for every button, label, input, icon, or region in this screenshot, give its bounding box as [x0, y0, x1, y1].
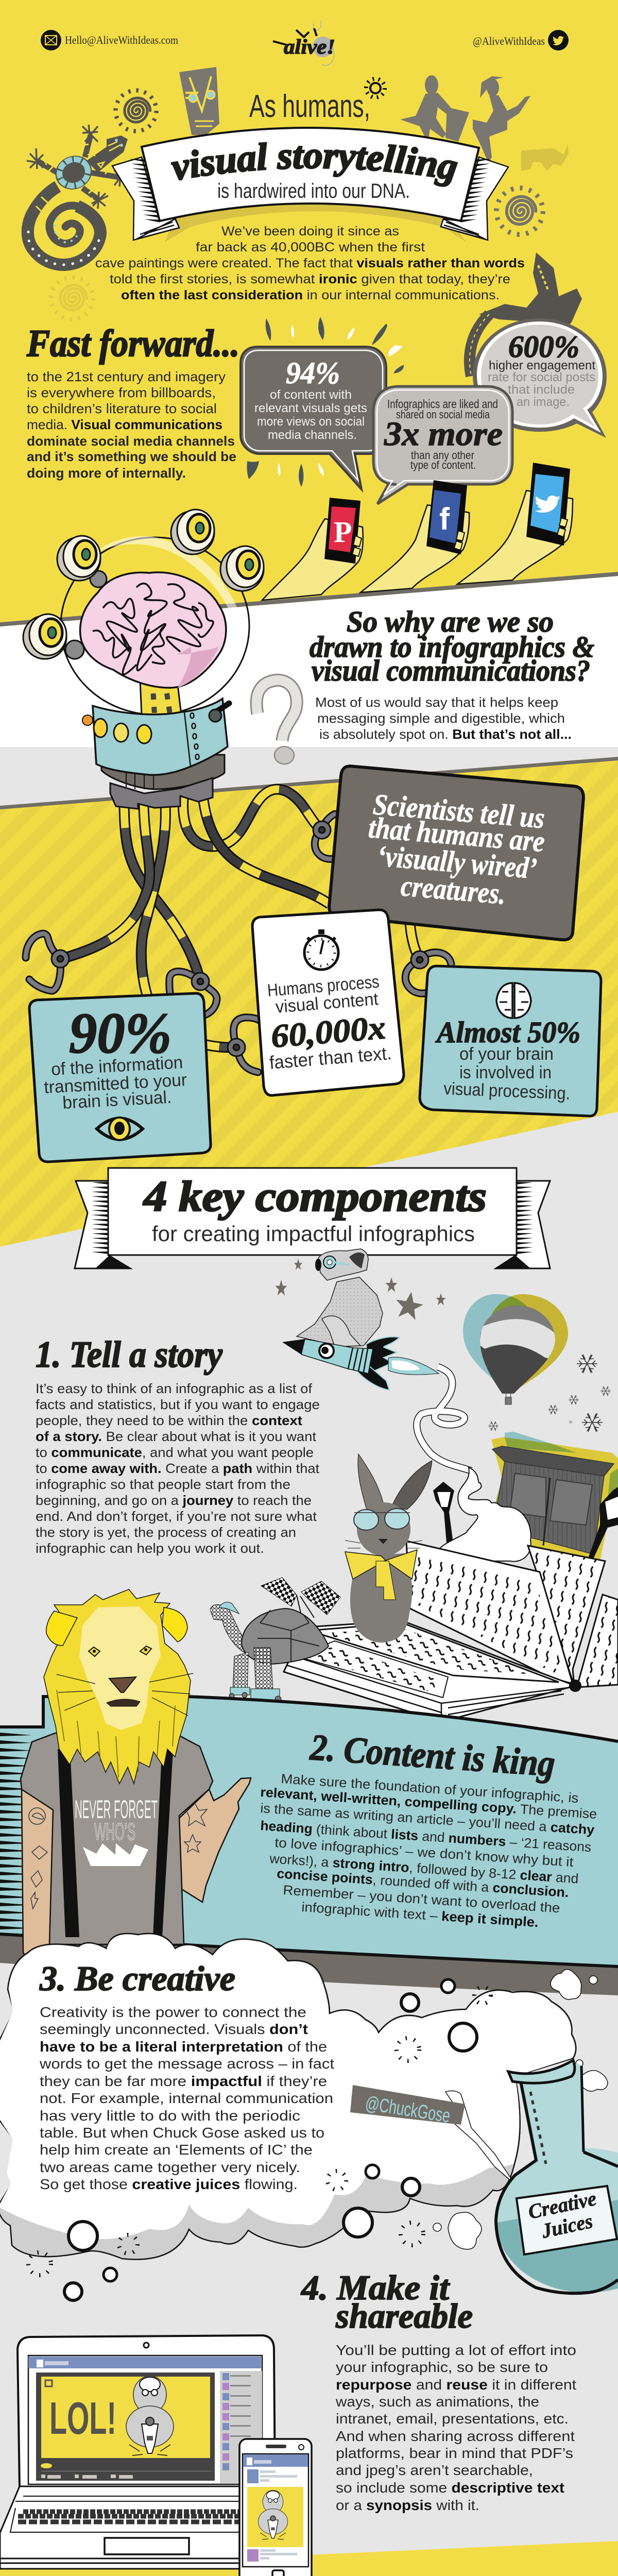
lion features [57, 1646, 193, 1777]
panel: scientists card: Scientists tell us [372, 787, 546, 835]
heading: 4. Make it shareable: shareable [335, 2296, 473, 2335]
header: twitter contact: @AliveWithIdeas [473, 35, 545, 47]
grey t-shirt [21, 1733, 213, 1944]
text block: tell a story [36, 1381, 320, 1556]
stat bubble: 3x more: 3x more [384, 415, 503, 453]
text block: be creative [39, 2004, 334, 2192]
robot eyes on stalks [23, 510, 264, 659]
robot: teal collar and base [82, 699, 229, 809]
phone in hand: Facebook: f [439, 502, 450, 536]
text block: tell a story: infographic so that people start from the [36, 1477, 290, 1492]
clamps [26, 814, 451, 1072]
decoration: small black sun [366, 79, 385, 97]
stat bubble: 3x more: shared on social media [396, 408, 490, 421]
illustration: laptop [0, 2335, 275, 2569]
laptop screen [28, 2355, 262, 2484]
rocket [282, 1337, 439, 1390]
panel: 60,000x card: faster than text. [268, 1042, 392, 1073]
text block: content is king: relevant, well-written, compelling copy. The premise [260, 1784, 597, 1822]
text block: tell a story: to come away with. Create a path within that [36, 1461, 320, 1476]
flask label: Creative [526, 2187, 598, 2224]
text block: make it shareable: your infographic, so be sure to [336, 2359, 548, 2375]
panel: almost 50% card: visual processing. [443, 1079, 571, 1104]
flask body [494, 2060, 618, 2298]
stat bubble: 3x more: than any other [411, 449, 474, 462]
wire set [61, 789, 420, 1047]
background: yellow closing section [0, 2541, 618, 2576]
text block: be creative: seemingly unconnected. Visuals don’t [40, 2021, 308, 2037]
text block: why infographics: Most of us would say that it helps keep [315, 694, 558, 710]
heading: 1. Tell a story: 1. Tell a story [36, 1334, 223, 1375]
t-shirt slogan: WHO’S [94, 1818, 135, 1845]
robot: wires and clamps [26, 789, 451, 1072]
decoration: tribal dancers [400, 75, 530, 163]
panel: 90% card: of the information [50, 1053, 183, 1079]
text block: fast forward paragraph: and it’s something we should be [27, 449, 236, 464]
text block: tell a story: people, they need to be within the context [36, 1413, 302, 1428]
text block: content is king: infographic with text – keep it simple. [301, 1899, 539, 1930]
text block: tell a story: It’s easy to think of an infographic as a list of [36, 1381, 313, 1396]
illustration: lamp posts [433, 1482, 618, 1561]
background: yellow top section [0, 0, 618, 629]
text block: make it shareable: so include some descriptive text [336, 2480, 564, 2496]
decoration: snowflakes [488, 1354, 611, 1432]
text block: be creative: have to be a literal interpretation of the [40, 2039, 327, 2055]
flask label [517, 2186, 617, 2255]
illustration: koala on rocket [282, 1249, 471, 1471]
illustration: tortoise with flags [210, 1578, 340, 1706]
right arm [177, 1778, 251, 1902]
stat bubble: 94%: 94% [286, 356, 340, 390]
post toolbar [41, 2463, 211, 2479]
illustration: hot air balloon [463, 1294, 568, 1404]
illustration: lion-headed man: NEVER FORGET [75, 1795, 158, 1824]
text block: content is king: is the same as writing an article – you’ll need a catchy [260, 1800, 595, 1838]
panel: almost 50% card: Almost 50% [435, 1015, 580, 1049]
panel: 90% card: 90% [69, 1002, 171, 1065]
section banner: 4 key components [75, 1168, 550, 1268]
text block: tell a story: to communicate , and what you want people [36, 1445, 314, 1460]
text block: make it shareable: platforms, bear in mind that PDF’s [336, 2445, 573, 2461]
phone in hand: Pinterest [262, 498, 363, 600]
panel: 60,000x card [252, 910, 404, 1095]
text block: content is king: works!), a strong intro, followed by 8-12 clear and [269, 1851, 579, 1886]
decoration: rays around 94% bubble [247, 317, 404, 487]
stat bubble: 600%: an image. [517, 395, 570, 409]
stat bubble: 600%: higher engagement [489, 359, 595, 372]
book base pages [284, 1621, 575, 1722]
panel: almost 50% card: is involved in [459, 1063, 552, 1082]
smoke trail [417, 1367, 471, 1471]
phone in hand: Pinterest: P [334, 515, 352, 549]
text block: fast forward paragraph: media. Visual communications [27, 417, 222, 432]
panel: almost 50% card [420, 966, 601, 1116]
illustration: door [489, 1432, 618, 1561]
text block: fast forward paragraph [27, 369, 236, 481]
section banner: 4 key components: for creating impactful infographics [152, 1222, 475, 1246]
text block: fast forward paragraph: to the 21st century and imagery [27, 369, 226, 384]
panel: 90% card: transmitted to your [43, 1070, 187, 1097]
heading: Fast forward: Fast forward... [26, 323, 239, 365]
decoration: tribal crocodile [470, 252, 582, 376]
heading: why infographics [310, 605, 594, 687]
icon: stopwatch [304, 929, 338, 970]
panel: 60,000x card: visual content [275, 989, 380, 1017]
text block: be creative: has very little to do with the periodic [40, 2108, 300, 2124]
text block: content is king: Remember – you don’t want to overload the [283, 1882, 560, 1916]
text block: make it shareable: repurpose and reuse it in different [336, 2377, 576, 2393]
t-shirt slogan [75, 1795, 158, 1866]
text block: make it shareable: ways, such as animations, the [335, 2394, 539, 2410]
dome glass [61, 536, 249, 715]
text block: tell a story: the story is yet, the process of creating an [36, 1524, 296, 1540]
flask: creative juices [494, 2060, 618, 2298]
text block: fast forward paragraph: dominate social media channels [27, 433, 235, 449]
icon: eye [97, 1117, 143, 1140]
book fan pages [406, 1541, 618, 1687]
text block: content is king: heading (think about lists and numbers – ‘21 reasons [260, 1818, 592, 1855]
stat bubble: 3x more: Infographics are liked and [387, 397, 498, 411]
phone in hand: Facebook [360, 480, 469, 592]
text block: content is king [260, 1771, 597, 1930]
header: twitter contact [473, 30, 569, 50]
title text: As humans: As humans, [249, 89, 370, 124]
heading: 4. Make it shareable [300, 2268, 473, 2335]
lion face [79, 1606, 161, 1730]
text block: make it shareable: And when sharing across different [336, 2428, 575, 2444]
text block: be creative: not. For example, internal communication [40, 2090, 333, 2106]
illustration: smartphone [239, 2439, 312, 2576]
title ribbon: is hardwired into our DNA. [217, 180, 410, 202]
left arm [22, 1788, 58, 1963]
panel: almost 50% card: of your brain [459, 1044, 554, 1064]
small clouds [448, 1969, 608, 2249]
background: striped yellow band [0, 747, 618, 1262]
header: alive logo [273, 21, 335, 65]
brain [80, 572, 226, 715]
suspenders [58, 1741, 174, 1937]
decoration: spiral sun right [496, 188, 543, 234]
sign: @ChuckGose held by a hand: @ChuckGose [364, 2092, 452, 2127]
text block: be creative: Creativity is the power to connect the [40, 2004, 306, 2020]
lion mane [44, 1589, 191, 1784]
stat bubble: 600%: 600% [508, 330, 579, 364]
panel: scientists card: creatures. [400, 869, 507, 911]
header: email contact [41, 30, 178, 50]
text block: make it shareable: intranet, email, presentations, etc. [336, 2411, 569, 2427]
text block: be creative: So get those creative juices flowing. [40, 2176, 298, 2192]
panel: scientists card: that humans are [367, 810, 546, 858]
icon: question mark [256, 680, 297, 764]
decoration: faded cave bull [521, 144, 569, 171]
stat bubble: 94% [241, 347, 386, 489]
text block: be creative: words to get the message across – in fact [39, 2056, 334, 2072]
heading: why infographics: So why are we so [347, 605, 554, 638]
illustration: steam cloud [435, 1467, 531, 1562]
text block: make it shareable: or a synopsis with it. [336, 2497, 479, 2513]
header: alive logo: alive! [284, 35, 335, 58]
text block: content is king: concise points, rounded off with a conclusion. [277, 1866, 569, 1900]
stat bubble: 94%: more views on social [257, 415, 365, 429]
panel: scientists card: ‘visually wired’ [376, 839, 538, 885]
header: email contact: Hello@AliveWithIdeas.com [65, 33, 178, 46]
illustration: open book [284, 1541, 618, 1722]
icon: brain [496, 983, 531, 1018]
panel: thought cloud [0, 1934, 576, 2260]
panel: 90% card: brain is visual. [62, 1088, 172, 1113]
text block: why infographics: messaging simple and digestible, which [317, 710, 565, 726]
text block: be creative: they can be far more impactful if they’re [40, 2073, 327, 2089]
clamp hubs [52, 821, 428, 1056]
text block: why infographics: is absolutely spot on. But that’s not all... [319, 726, 572, 742]
panel: teal content band [0, 1697, 618, 1995]
heading: why infographics: drawn to infographics & [310, 630, 594, 664]
decoration: spiral sun left [115, 90, 157, 131]
text block: tell a story: of a story. Be clear about what is it you want [36, 1429, 317, 1444]
text block: fast forward paragraph: doing more of internally. [27, 465, 186, 481]
stat bubble: 94%: relevant visuals gets [254, 401, 367, 415]
ring bubbles [64, 1976, 597, 2300]
decoration: stars [276, 1259, 446, 1321]
heading: 4. Make it shareable: 4. Make it [300, 2268, 450, 2307]
background: white diagonal band [0, 572, 618, 809]
intro paragraph: often the last consideration in our internal communications. [121, 288, 500, 302]
stat bubble: 600% [473, 318, 607, 438]
panel: 90% card [29, 993, 211, 1162]
stat bubble: 94%: media channels. [268, 428, 357, 442]
phone in hand: Twitter [457, 463, 573, 584]
laptop camera [144, 2343, 149, 2348]
intro paragraph [95, 224, 525, 302]
sidebar list [222, 2373, 251, 2470]
robot: dome and brain [23, 510, 264, 715]
panel: 60,000x card: Humans process [267, 972, 380, 1001]
text block: tell a story: infographic can help you work it out. [36, 1540, 264, 1556]
stat bubble: 3x more: type of content. [410, 459, 476, 471]
flask label: Juices [539, 2209, 595, 2243]
text block: make it shareable: You’ll be putting a lot of effort into [336, 2342, 576, 2358]
text block: content is king: Make sure the foundation of your infographic, is [281, 1771, 579, 1806]
laptop lid [18, 2335, 275, 2488]
intro paragraph: We’ve been doing it since as [221, 224, 399, 239]
text block: be creative: two areas came together very nicely. [40, 2159, 300, 2175]
intro paragraph: told the first stories, is somewhat ironic given that today, they’re [110, 272, 510, 286]
sign: @ChuckGose held by a hand [350, 2085, 515, 2184]
sparkles [28, 1987, 491, 2275]
decoration: faded spiral sun [51, 277, 93, 319]
decoration: tribal mask [179, 67, 219, 135]
text block: tell a story: facts and statistics, but if you want to engage [36, 1397, 320, 1412]
text block: make it shareable [335, 2342, 576, 2513]
panel: 60,000x card: 60,000x [269, 1009, 387, 1055]
text block: be creative: table. But when Chuck Gose asked us to [40, 2125, 324, 2141]
title banner shadow [165, 204, 466, 242]
panel: scientists card [329, 766, 583, 940]
text block: content is king: to love infographics’ – we don’t know why but it [274, 1835, 574, 1870]
intro paragraph: far back as 40,000BC when the first [196, 240, 425, 255]
text block: make it shareable: and jpeg’s aren’t searchable, [336, 2462, 533, 2478]
laptop base and keyboard [0, 2486, 247, 2569]
title ribbon [111, 127, 509, 241]
lion ears [46, 1607, 187, 1646]
heading: why infographics: visual communications? [312, 654, 590, 687]
background: light grey body [0, 1247, 618, 2576]
text block: why infographics [315, 694, 572, 742]
heading: 2. Content is king: 2. Content is king [308, 1726, 556, 1784]
bow tie [345, 1550, 417, 1600]
laptop screen: LOL! [49, 2393, 116, 2444]
stat bubble: 600%: that include [508, 383, 575, 397]
decoration: tribal lizard [27, 125, 128, 265]
text block: tell a story: end. And don’t forget, if you’re not sure what [36, 1509, 317, 1524]
illustration: lion-headed man [21, 1589, 251, 1963]
text block: fast forward paragraph: to children’s literature to social [27, 401, 217, 416]
koala [297, 1249, 383, 1347]
section banner: 4 key components: 4 key components [143, 1173, 487, 1221]
title ribbon: visual storytelling [171, 142, 458, 187]
text block: tell a story: beginning, and go on a journey to reach the [36, 1493, 312, 1508]
stat bubble: 3x more [373, 386, 512, 504]
illustration: rabbit [345, 1454, 432, 1642]
stat bubble: 600%: rate for social posts [488, 370, 595, 384]
text block: fast forward paragraph: is everywhere from billboards, [27, 385, 216, 400]
intro paragraph: cave paintings were created. The fact that visuals rather than words [95, 256, 525, 270]
arm tattoos [29, 1803, 207, 1909]
decoration: bubbles and sparkles [28, 1969, 608, 2300]
stat bubble: 94%: of content with [270, 388, 352, 402]
text block: be creative: help him create an ‘Elements of IC’ the [40, 2142, 313, 2158]
heading: 3. Be creative: 3. Be creative [39, 1959, 235, 1998]
